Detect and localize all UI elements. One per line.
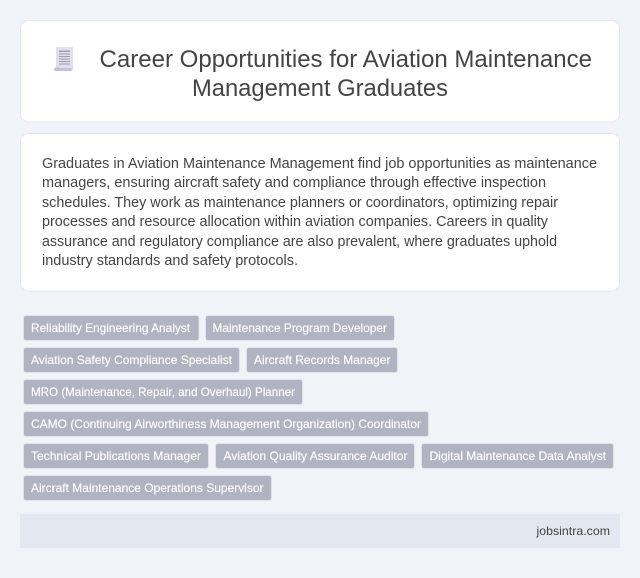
tag [24, 348, 240, 372]
tag: Aircraft Records Manager [254, 353, 391, 367]
description text: Graduates in Aviation Maintenance Management find job opportunities as maintenance [42, 156, 597, 172]
title [100, 46, 592, 102]
icon: document scroll [54, 47, 73, 71]
tag [24, 412, 428, 436]
footer text: jobsintra.com [535, 524, 610, 538]
title: Management Graduates [192, 75, 448, 102]
tag [24, 316, 199, 340]
career tags [24, 316, 614, 500]
panel: description [20, 134, 620, 291]
description text: managers, ensuring aircraft safety and compliance through effective inspection [42, 175, 546, 191]
tag: CAMO (Continuing Airworthiness Management Organization) Coordinator [31, 417, 421, 431]
tag: Digital Maintenance Data Analyst [430, 449, 607, 463]
title: Career Opportunities for Aviation Maintenance [100, 46, 592, 73]
tag [246, 348, 398, 372]
description text: processes and resource allocation within aviation companies. Careers in quality [42, 214, 549, 230]
tag [216, 444, 414, 468]
description text: industry standards and safety protocols. [42, 253, 298, 269]
description text [42, 156, 597, 269]
tag [206, 316, 394, 340]
tag [24, 444, 208, 468]
tag [24, 380, 302, 404]
tag: Aircraft Maintenance Operations Supervisor [31, 481, 264, 495]
tag: Technical Publications Manager [31, 449, 201, 463]
description text: assurance and regulatory compliance are also prevalent, where graduates uphold [42, 234, 557, 250]
footer bar [20, 514, 620, 548]
tag: Aviation Safety Compliance Specialist [31, 353, 233, 367]
tag [24, 476, 272, 500]
tag: MRO (Maintenance, Repair, and Overhaul) Planner [31, 385, 295, 399]
tag: Aviation Quality Assurance Auditor [224, 449, 408, 463]
tag: Maintenance Program Developer [212, 321, 387, 335]
tag [422, 444, 614, 468]
header panel [20, 20, 620, 122]
description text: schedules. They work as maintenance planners or coordinators, optimizing repair [42, 195, 558, 211]
tag: Reliability Engineering Analyst [31, 321, 191, 335]
